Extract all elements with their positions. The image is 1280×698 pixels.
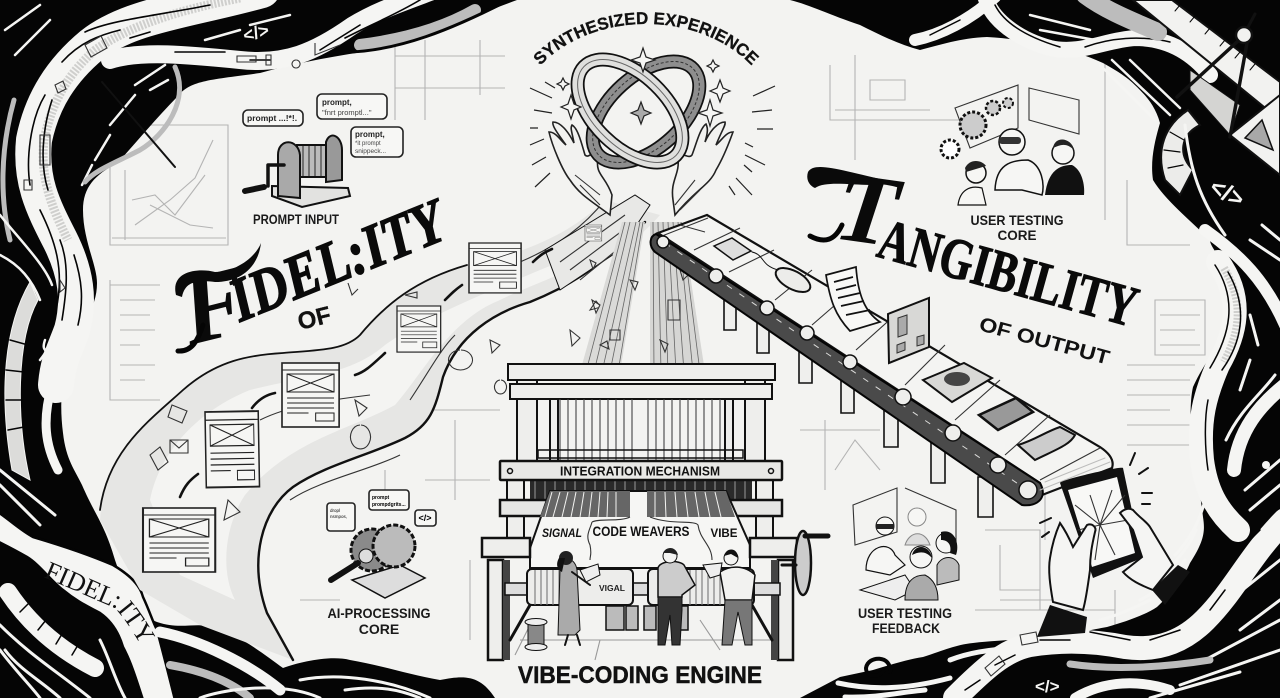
panel: user testing feedback	[853, 488, 959, 636]
panel: ai processing core	[327, 490, 436, 637]
frame: bottom right big ribbon	[955, 520, 1280, 698]
synthesized experience knot with hands	[530, 12, 776, 217]
panel: user testing core	[941, 85, 1084, 243]
frame: gray arc	[85, 67, 180, 182]
chat bubbles: prompt	[372, 495, 390, 501]
wireframe card 1	[143, 508, 215, 572]
frame: right block ribbon	[1234, 385, 1280, 470]
label: ai-processing core: CORE	[359, 621, 399, 637]
frame: left ribbon	[33, 0, 262, 385]
conveyor top surface	[658, 215, 1113, 495]
icon: dark ring	[574, 42, 718, 182]
speech bubble: prompt ...!*!.	[247, 113, 297, 123]
speech bubble	[243, 110, 303, 126]
icon: bright ring	[559, 41, 701, 181]
vibe coding engine loom	[482, 364, 828, 660]
icon: spool crank	[245, 136, 350, 207]
icon: gear crank	[331, 525, 425, 598]
item: chip device	[923, 363, 992, 402]
conveyor belt	[651, 215, 1113, 517]
frame: black dashes upper left	[5, 5, 290, 185]
wireframe card 4	[397, 306, 441, 352]
speech bubble: *it prompt	[355, 141, 381, 147]
background sketches	[110, 40, 1205, 650]
decorative swirling frame: FIDEL:ITY	[44, 562, 156, 641]
icon: man weaver two	[703, 549, 755, 645]
chat bubbles: nsmpos,	[330, 514, 347, 519]
frame: upper white strip	[110, 0, 430, 61]
beam: integration mechanism	[500, 461, 782, 480]
frame: bottom ribbon	[160, 632, 280, 690]
fabric labels	[542, 524, 738, 540]
speech bubble: "fnrt promptl..."	[322, 108, 372, 117]
frame: top right ribbons	[915, 0, 995, 40]
frame: right black strands: </>	[1205, 173, 1248, 214]
heading: tangibility: ANGIBILITY	[872, 206, 1145, 340]
conveyor dark band	[651, 234, 1043, 505]
item: book	[888, 298, 929, 363]
icon: gears	[941, 98, 1013, 158]
speech bubble: prompt,	[322, 98, 352, 107]
speech bubble	[351, 127, 403, 157]
wireframe card 5	[469, 243, 521, 293]
upper frame	[508, 364, 775, 472]
speech bubble	[317, 94, 387, 119]
icon: man weaver one	[658, 548, 695, 645]
label: prompt input: PROMPT INPUT	[253, 212, 340, 227]
label: of: OF	[295, 302, 334, 336]
item: paper	[826, 267, 880, 331]
chat bubbles: prompdgrits...	[372, 502, 406, 508]
item: shoe	[1018, 427, 1075, 460]
phone with hands	[1037, 453, 1190, 637]
item: mouse	[752, 252, 814, 297]
heading: tangibility	[807, 150, 1145, 340]
side posts	[507, 480, 773, 540]
label: user testing core: USER TESTING	[970, 213, 1064, 228]
wireframe card 3	[282, 363, 339, 427]
frame: left black streaks and ruler	[0, 215, 52, 360]
icon: left hand	[1049, 523, 1095, 610]
decorative swirling frame: </>	[241, 20, 271, 46]
icon: wheel and handle	[782, 531, 828, 595]
decorative swirling frame: </>	[1035, 677, 1060, 696]
item: ui card	[714, 238, 751, 260]
icon: woman weaver	[557, 551, 600, 645]
fabric labels: CODE WEAVERS	[592, 524, 690, 539]
small card	[585, 225, 602, 241]
fabric	[530, 491, 750, 568]
fidelity flow ribbon	[100, 195, 660, 660]
heading: fidelity: IDEL:ITY	[219, 186, 459, 335]
frame: ruler arc right	[1161, 110, 1200, 195]
threads to loom	[580, 222, 705, 372]
icon: right hand	[1120, 509, 1173, 590]
heading: synthesized experience: SYNTHESIZED EXPERIENCE	[534, 12, 760, 66]
table beams and front posts	[482, 538, 797, 660]
wireframe card 2	[205, 411, 260, 488]
axle and rollers: VIGAL	[599, 583, 625, 593]
chat bubbles: dropl	[330, 508, 340, 513]
heading: fidelity: F	[168, 246, 259, 367]
conveyor legs	[724, 297, 993, 517]
chat bubbles	[327, 490, 436, 531]
heading: tangibility: T	[829, 150, 909, 269]
frame: ruler and set square	[1133, 0, 1280, 120]
label: of output: OF OUTPUT	[977, 314, 1112, 370]
sparkles and rays	[530, 48, 775, 195]
heading: vibe-coding engine: VIBE-CODING ENGINE	[518, 662, 762, 689]
icon: sleeve	[1037, 565, 1190, 637]
flow scraps	[150, 283, 601, 520]
icon: tester people	[958, 129, 1084, 205]
frame: lower-left ruler	[8, 592, 95, 668]
label: user testing core: CORE	[997, 228, 1037, 243]
icon: tablet	[1060, 468, 1142, 578]
frame: right gray ribbon	[1201, 262, 1238, 530]
beam: integration mechanism: INTEGRATION MECHANISM	[560, 464, 720, 478]
flow arrows	[180, 249, 552, 497]
label: user testing feedback: FEEDBACK	[872, 621, 940, 636]
speech bubble: prompt,	[355, 130, 385, 139]
speech bubble: snippeck...	[355, 148, 386, 155]
label: user testing feedback: USER TESTING	[858, 606, 952, 621]
treadles	[606, 606, 688, 630]
icon: left hand	[549, 122, 612, 215]
fabric labels: SIGNAL	[542, 528, 582, 540]
icon: spool	[525, 618, 547, 650]
dark warp bed	[530, 480, 752, 502]
conveyor rollers	[657, 236, 1037, 499]
floor lines	[515, 620, 770, 660]
frame: lower-left banner	[0, 510, 175, 698]
icon: right hand	[672, 122, 733, 215]
second beam	[500, 500, 782, 516]
panel: prompt input	[243, 94, 403, 227]
chat bubbles: </>	[418, 513, 432, 523]
icon: feedback group	[860, 508, 959, 600]
heading: fidelity	[168, 186, 459, 367]
item: tablet	[979, 398, 1033, 430]
label: ai-processing core: AI-PROCESSING	[328, 605, 431, 621]
axle and rollers	[505, 569, 780, 605]
icon: drafting compass	[1177, 14, 1255, 137]
fabric labels: VIBE	[710, 528, 738, 540]
warp threads	[560, 399, 720, 460]
